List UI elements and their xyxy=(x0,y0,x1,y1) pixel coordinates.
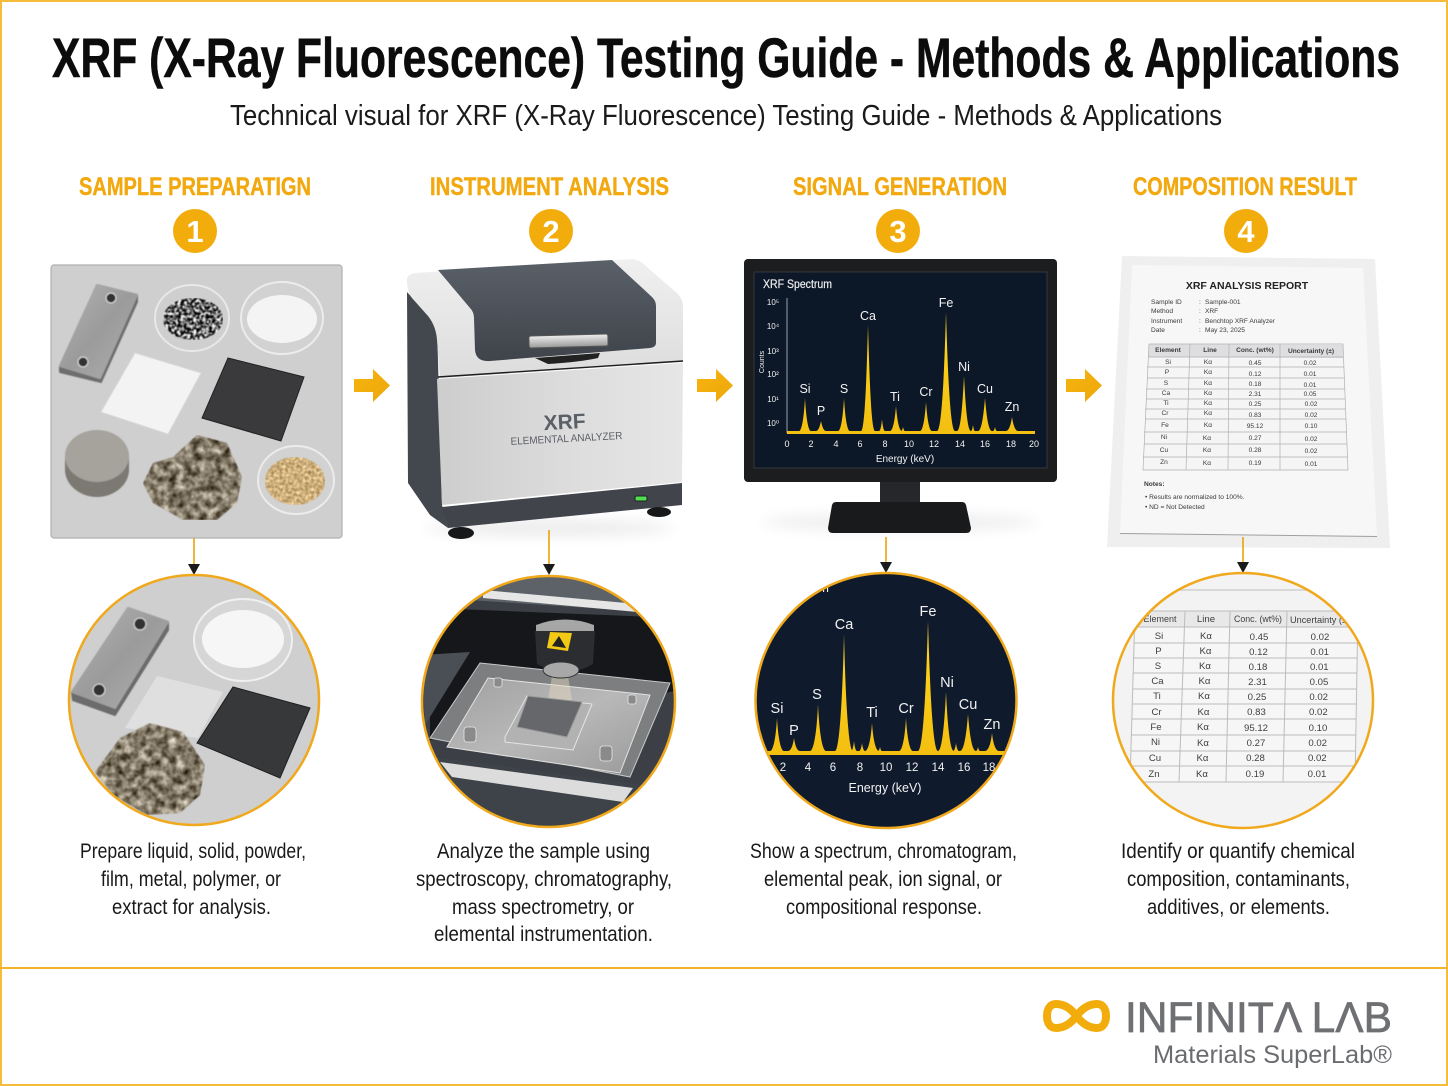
results table: Fe xyxy=(1161,422,1169,429)
spectrum chart: Zn xyxy=(1005,400,1019,414)
spectrum chart: 10⁴ xyxy=(767,322,780,331)
spectrum chart: Ti xyxy=(890,390,900,404)
spectrum chart: 10³ xyxy=(767,347,779,356)
results table: Zn xyxy=(1160,459,1168,466)
results table: 0.01 xyxy=(1304,371,1317,378)
results table: Cu xyxy=(1160,447,1169,454)
close-up table: Kα xyxy=(1197,753,1209,764)
analyzer lid xyxy=(438,260,656,364)
results table: Kα xyxy=(1203,460,1211,467)
close-up table: 0.19 xyxy=(1246,769,1264,780)
icon: infinity mark xyxy=(1047,1004,1106,1028)
close-up rock xyxy=(95,723,205,815)
results table: 0.02 xyxy=(1305,448,1318,455)
results table: Element xyxy=(1155,347,1182,354)
connector arrow 2 xyxy=(543,530,555,575)
results table: Uncertainty (±) xyxy=(1288,348,1334,355)
spectrum chart: 10 xyxy=(904,439,914,449)
close-up table: S xyxy=(1155,661,1161,672)
results table: 0.27 xyxy=(1249,435,1262,442)
close-up labels: Zn xyxy=(984,717,1000,733)
radiation warning label xyxy=(547,632,572,651)
left lid xyxy=(422,652,470,725)
close-up spectrum peaks xyxy=(768,622,1004,755)
close-up axis: 10 xyxy=(880,762,892,774)
report metadata: Instrument xyxy=(1151,318,1182,325)
spectrum chart xyxy=(759,296,1039,465)
close-up table: Kα xyxy=(1198,691,1210,702)
X-ray beam xyxy=(548,678,572,700)
close-up axis: 4 xyxy=(805,762,812,774)
close-up table: Element xyxy=(1144,614,1177,625)
results table: Si xyxy=(1165,359,1171,366)
monitor frame xyxy=(744,259,1057,482)
results table: 0.25 xyxy=(1249,401,1262,408)
arrow: step 3 to 4 xyxy=(1066,369,1102,402)
panel: monitor with spectrum xyxy=(744,259,1057,533)
chamber top band xyxy=(476,577,636,612)
results table: Ti xyxy=(1163,400,1169,407)
close-up white sheet xyxy=(125,676,223,738)
spectrum chart: 18 xyxy=(1006,439,1016,449)
analyzer base xyxy=(442,483,682,528)
report metadata: : xyxy=(1199,327,1201,334)
monitor screen xyxy=(754,272,1047,468)
close-up table: 0.02 xyxy=(1308,738,1327,749)
logo xyxy=(1047,994,1393,1069)
close-up labels: P xyxy=(789,723,799,739)
description 3: elemental peak, ion signal, or xyxy=(764,868,1002,891)
close-up labels: Fe xyxy=(920,604,936,620)
connector arrow 4 xyxy=(1237,537,1249,573)
results table: P xyxy=(1165,369,1170,376)
close-up table: Kα xyxy=(1197,738,1209,749)
close-up table: Ni xyxy=(1151,737,1160,748)
close-up table: 0.02 xyxy=(1309,707,1328,718)
description 1: extract for analysis. xyxy=(112,896,271,919)
description 2: mass spectrometry, or xyxy=(452,896,634,919)
close-up table: 0.02 xyxy=(1308,753,1327,764)
results table: Ni xyxy=(1161,434,1168,441)
white polymer sheet xyxy=(101,353,201,434)
close-up axis: 2 xyxy=(780,762,786,774)
results table: 0.02 xyxy=(1305,412,1318,419)
spectrum chart: 14 xyxy=(955,439,965,449)
spectrum chart: 6 xyxy=(857,439,863,449)
results table: 0.01 xyxy=(1304,382,1317,389)
results table: Kα xyxy=(1204,410,1212,417)
step number 3 xyxy=(876,209,920,253)
results table: 0.45 xyxy=(1249,360,1262,367)
dark chamber xyxy=(430,608,680,740)
results table: 0.02 xyxy=(1305,436,1318,443)
results table: Kα xyxy=(1204,400,1212,407)
close-up table: Kα xyxy=(1200,646,1212,657)
results table: Line xyxy=(1203,347,1217,354)
description 4: Identify or quantify chemical xyxy=(1121,840,1355,863)
results table: Kα xyxy=(1204,380,1212,387)
results table: Cr xyxy=(1162,410,1169,417)
close-up labels: S xyxy=(812,687,822,703)
rock xyxy=(143,435,242,520)
report metadata: Benchtop XRF Analyzer xyxy=(1205,318,1276,325)
spectrum chart: 10² xyxy=(767,370,779,379)
status LED xyxy=(635,496,647,501)
analyzer label xyxy=(509,408,623,448)
results table: 95.12 xyxy=(1247,423,1264,430)
close-up table: Zn xyxy=(1148,769,1160,780)
close-up axis: 6 xyxy=(830,762,836,774)
results table: 0.83 xyxy=(1249,412,1262,419)
close-up labels xyxy=(771,604,1000,739)
analyzer label: ELEMENTAL ANALYZER xyxy=(510,430,623,448)
step number 2 xyxy=(529,209,573,253)
description 2: spectroscopy, chromatography, xyxy=(416,868,672,891)
close-up table: 0.10 xyxy=(1309,723,1327,734)
results table: Conc. (wt%) xyxy=(1236,347,1274,354)
detail circle: spectrum close-up xyxy=(744,568,1022,833)
results table: 0.02 xyxy=(1304,360,1317,367)
spectrum chart: 10¹ xyxy=(767,395,779,404)
results table: Kα xyxy=(1204,369,1212,376)
report metadata: Sample-001 xyxy=(1205,299,1241,306)
results table: 0.28 xyxy=(1249,447,1262,454)
close-up table: Uncertainty (±) xyxy=(1290,615,1350,626)
report metadata: : xyxy=(1199,308,1201,315)
report metadata: Sample ID xyxy=(1151,299,1182,306)
close-up table: Kα xyxy=(1197,722,1209,733)
results table: 0.19 xyxy=(1249,460,1262,467)
report notes: • ND = Not Detected xyxy=(1145,504,1205,511)
steel plate xyxy=(447,678,650,773)
close-up table: 0.12 xyxy=(1249,647,1268,658)
results table: 0.05 xyxy=(1304,391,1317,398)
report metadata: XRF xyxy=(1205,308,1218,315)
results table: Kα xyxy=(1204,422,1212,429)
spectrum chart: Cu xyxy=(977,382,993,396)
report heading: XRF ANALYSIS REPORT xyxy=(1186,280,1309,292)
close-up table: 0.18 xyxy=(1249,662,1267,673)
subtitle: Technical visual for XRF (X-Ray Fluorescence) Testing Guide - Methods & Applications xyxy=(230,100,1222,132)
description 2 xyxy=(416,840,672,946)
close-up axis: 12 xyxy=(906,762,918,774)
close-up table: Kα xyxy=(1199,676,1211,687)
spectrum chart: 10⁵ xyxy=(767,298,779,307)
step heading 4: COMPOSITION RESULT xyxy=(1133,173,1357,201)
spectrum chart: Ca xyxy=(860,309,876,323)
description 4 xyxy=(1121,840,1355,919)
close-up labels: Cu xyxy=(959,697,977,713)
report metadata: Date xyxy=(1151,327,1165,334)
arrow: step 2 to 3 xyxy=(697,369,733,402)
close-up table: Cu xyxy=(1149,753,1161,764)
cropped chart title: XRF Spectrum xyxy=(744,580,829,595)
report backing xyxy=(1107,256,1390,548)
report metadata: May 23, 2025 xyxy=(1205,327,1245,334)
analyzer front panel xyxy=(437,361,683,505)
panel: sample photo xyxy=(51,265,342,538)
report metadata xyxy=(1151,299,1276,334)
connector arrow 1 xyxy=(188,538,200,575)
step number 4 xyxy=(1224,209,1268,253)
connector arrow 3 xyxy=(880,537,892,573)
arrow: step 1 to 2 xyxy=(354,369,390,402)
report notes: • Results are normalized to 100%. xyxy=(1145,494,1245,501)
step number 3: 3 xyxy=(889,214,907,249)
close-up labels: Ti xyxy=(866,705,878,721)
detail circle: samples close-up xyxy=(60,570,330,830)
analyzer label: XRF xyxy=(543,410,586,435)
spectrum chart: 10⁰ xyxy=(767,419,779,428)
results table: Kα xyxy=(1203,435,1211,442)
close-up table: 0.45 xyxy=(1250,632,1268,643)
close-up axis: 16 xyxy=(958,762,970,774)
results table xyxy=(1143,344,1348,470)
report metadata: Method xyxy=(1151,308,1173,315)
results table: S xyxy=(1164,380,1169,387)
spectrum chart: 20 xyxy=(1029,439,1039,449)
results table: 0.12 xyxy=(1249,371,1262,378)
sample block xyxy=(517,696,582,737)
close-up black sheet xyxy=(197,687,310,778)
spectrum chart: S xyxy=(840,382,848,396)
close-up table: 0.27 xyxy=(1247,738,1265,749)
results table: 0.02 xyxy=(1305,401,1318,408)
close-up labels: Ca xyxy=(835,617,854,633)
panel: XRF analyzer xyxy=(407,259,683,539)
spectrum chart: P xyxy=(817,404,825,418)
description 4: composition, contaminants, xyxy=(1127,868,1350,891)
spectrum chart: 8 xyxy=(882,439,888,449)
close-up table: 0.02 xyxy=(1309,692,1328,703)
step number 2: 2 xyxy=(542,214,560,249)
close-up table: Kα xyxy=(1199,661,1211,672)
close-up table: 0.28 xyxy=(1246,753,1265,764)
report paper xyxy=(1120,265,1377,536)
step number 4: 4 xyxy=(1237,214,1255,249)
spectrum chart: 4 xyxy=(833,439,839,449)
close-up table: Conc. (wt%) xyxy=(1234,614,1282,625)
spectrum chart: 12 xyxy=(929,439,939,449)
lower front bands xyxy=(440,762,633,802)
X-ray tube head xyxy=(535,620,595,678)
chart title: XRF Spectrum xyxy=(763,279,832,291)
close-up table: P xyxy=(1155,646,1162,657)
analyzer left side xyxy=(407,292,448,528)
close-up axis: 8 xyxy=(857,762,863,774)
sample stage xyxy=(505,696,592,750)
spectrum chart: Energy (keV) xyxy=(876,454,934,465)
logo wordmark: INFINITΛ LΛB xyxy=(1125,994,1392,1042)
close-up table: 0.01 xyxy=(1310,662,1329,673)
step number 1 xyxy=(173,209,217,253)
locating pins xyxy=(464,678,636,761)
description 2: elemental instrumentation. xyxy=(434,923,653,946)
close-up table: Kα xyxy=(1200,631,1212,642)
results table: Kα xyxy=(1204,359,1212,366)
spectrum chart: 2 xyxy=(808,439,814,449)
close-up table: Kα xyxy=(1196,769,1208,780)
close-up axis: 14 xyxy=(932,762,945,774)
results table: 0.18 xyxy=(1249,381,1262,388)
logo tagline: Materials SuperLab® xyxy=(1153,1041,1393,1069)
report metadata: : xyxy=(1199,318,1201,325)
close-up labels: Cr xyxy=(898,701,914,717)
lid handle xyxy=(529,334,608,348)
step heading 1: SAMPLE PREPARATIGN xyxy=(79,173,311,201)
description 1 xyxy=(80,840,306,919)
results table: 2.31 xyxy=(1249,391,1262,398)
spectrum chart: 0 xyxy=(784,439,790,449)
close-up table: Kα xyxy=(1198,707,1210,718)
spectrum chart: Cr xyxy=(919,385,933,399)
analyzer casing xyxy=(407,259,683,378)
panel: analysis report xyxy=(1107,256,1390,548)
steel tray xyxy=(430,663,670,777)
spectrum chart: Counts xyxy=(759,350,766,373)
close-up axis xyxy=(780,762,995,795)
close-up axis: Energy (keV) xyxy=(849,781,921,795)
description 2: Analyze the sample using xyxy=(437,840,650,863)
close-up table: 0.25 xyxy=(1248,692,1266,703)
report metadata: : xyxy=(1199,299,1201,306)
close-up table: Line xyxy=(1197,614,1215,625)
description 3: Show a spectrum, chromatogram, xyxy=(750,840,1017,863)
step heading 2: INSTRUMENT ANALYSIS xyxy=(430,173,669,201)
close-up axis: 18 xyxy=(983,762,995,774)
close-up table: 0.01 xyxy=(1308,769,1326,780)
report notes: Notes: xyxy=(1144,481,1165,488)
description 3 xyxy=(750,840,1017,919)
close-up labels: Si xyxy=(771,701,783,717)
analyzer feet xyxy=(448,507,671,539)
monitor stand xyxy=(828,482,971,533)
close-up table: 0.01 xyxy=(1310,647,1329,658)
results table: 0.01 xyxy=(1305,461,1318,468)
close-up table: 95.12 xyxy=(1244,723,1268,734)
results table: 0.10 xyxy=(1305,423,1318,430)
close-up table: Fe xyxy=(1150,722,1162,733)
close-up table: Si xyxy=(1155,631,1163,642)
results table: Kα xyxy=(1204,390,1212,397)
dish: metal shavings xyxy=(155,285,229,351)
close-up table: 0.83 xyxy=(1247,707,1266,718)
spectrum chart: Ni xyxy=(958,360,970,374)
black film sheet xyxy=(202,358,304,441)
results table: Kα xyxy=(1203,447,1211,454)
description 1: Prepare liquid, solid, powder, xyxy=(80,840,306,863)
spectrum chart: Si xyxy=(799,382,811,396)
dish: white powder xyxy=(241,282,323,354)
report notes xyxy=(1144,481,1245,511)
close-up table: Cr xyxy=(1151,707,1162,718)
step number 1: 1 xyxy=(186,214,204,249)
dish: tan granules xyxy=(258,446,334,514)
detail circle: sample chamber xyxy=(420,570,680,830)
close-up powder dish xyxy=(194,599,292,681)
detail circle: table close-up xyxy=(1105,568,1380,833)
close-up labels: Ni xyxy=(940,675,954,691)
close-up table: Ca xyxy=(1151,676,1164,687)
results table: Ca xyxy=(1162,390,1171,397)
description 4: additives, or elements. xyxy=(1147,896,1330,919)
close-up metal plate xyxy=(72,608,168,715)
close-up table: 2.31 xyxy=(1248,677,1267,688)
metal plate xyxy=(60,285,137,382)
spectrum chart: 16 xyxy=(980,439,990,449)
close-up table xyxy=(1130,611,1360,782)
close-up table: Ti xyxy=(1153,691,1161,702)
close-up table: 0.05 xyxy=(1310,677,1328,688)
step heading 3: SIGNAL GENERATION xyxy=(793,173,1007,201)
metal disc xyxy=(65,430,129,497)
close-up table: 0.02 xyxy=(1311,632,1329,643)
description 3: compositional response. xyxy=(786,896,982,919)
spectrum chart: Fe xyxy=(939,296,953,310)
description 1: film, metal, polymer, or xyxy=(101,868,281,891)
